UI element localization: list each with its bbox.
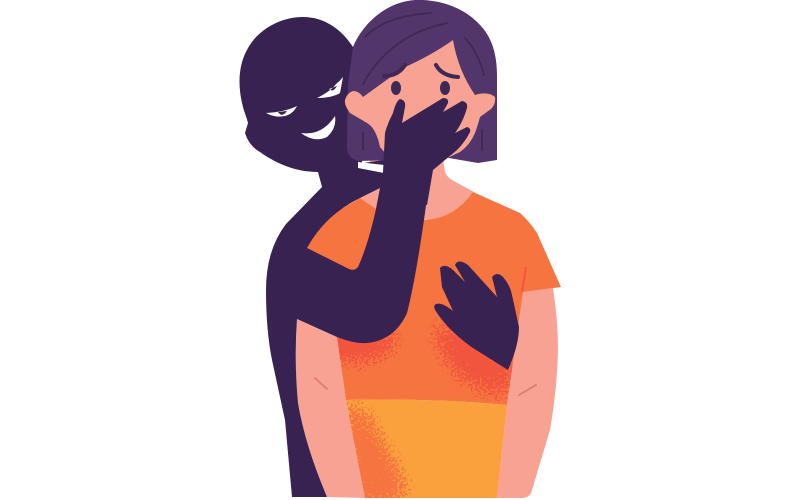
grain on shirt: [314, 318, 518, 400]
grain on hem: [340, 405, 412, 500]
gap under hair: [358, 162, 384, 173]
shadow figure left eye: [266, 106, 297, 117]
shadow figure right eye: [317, 77, 343, 98]
shadow hand over mouth: [378, 98, 470, 205]
orange t-shirt: [307, 190, 561, 405]
woman's face: [345, 40, 495, 170]
woman's hair: [347, 0, 497, 163]
illustration: shadow figure silencing a woman: [240, 0, 561, 498]
woman's right arm: [497, 288, 558, 498]
sleeve crease: [522, 267, 526, 292]
shadow figure body and arm: [266, 160, 430, 497]
woman's left arm: [296, 319, 365, 498]
shadow hand on chest: [434, 262, 519, 370]
arm creases: [315, 378, 536, 395]
shadow figure head: [240, 17, 370, 172]
woman's eyebrows and hair lines: [363, 13, 484, 150]
woman's eyes: [391, 81, 450, 95]
neck: [370, 160, 474, 220]
shadow figure smile: [301, 116, 335, 139]
yellow shirt hem: [340, 400, 507, 500]
left shoulder patch of skin: [360, 188, 380, 209]
